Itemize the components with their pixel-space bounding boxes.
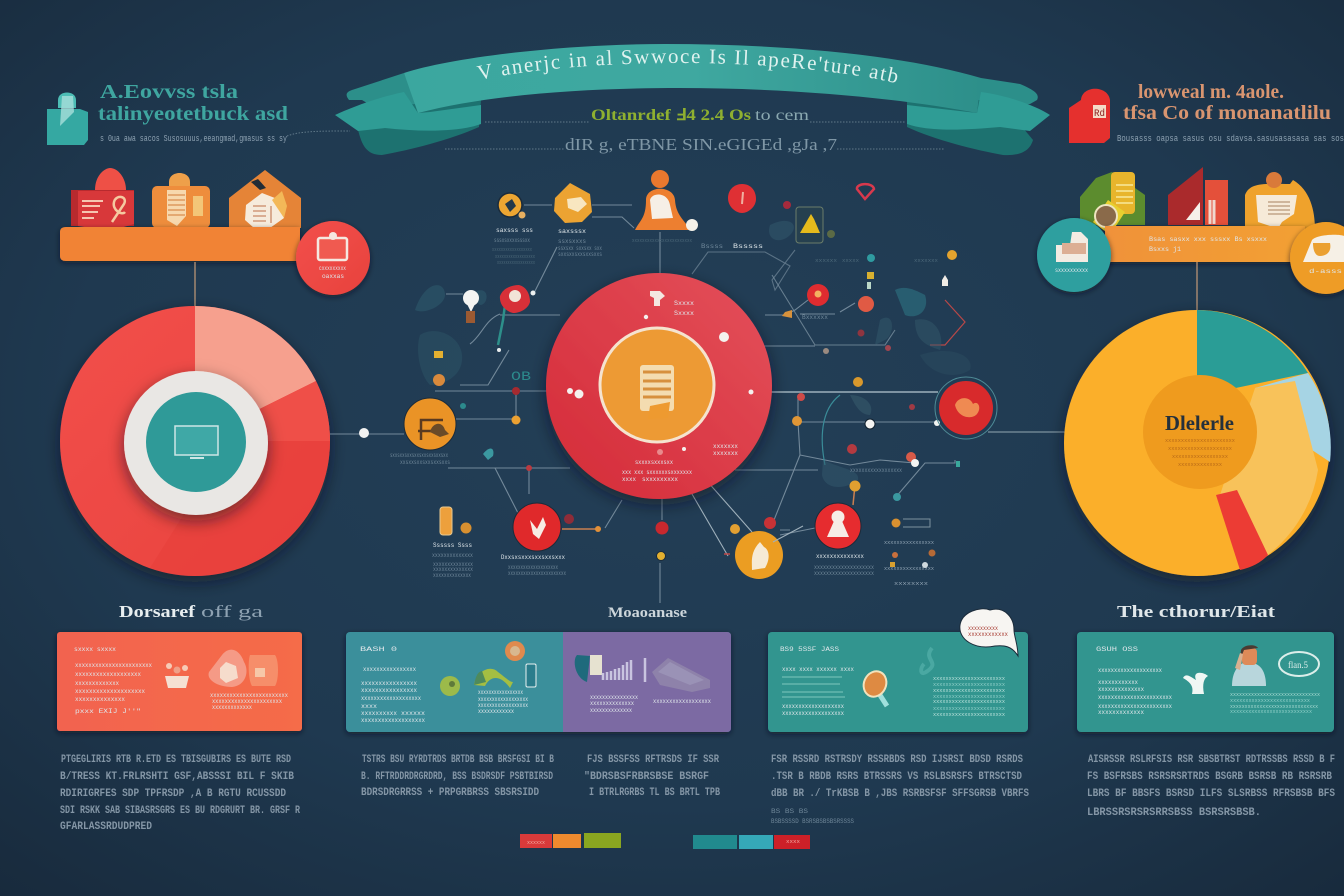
icon: bar columns — [575, 655, 645, 682]
phone icon with label: xxxxxxxxxxxxxx — [432, 552, 473, 559]
person icon — [635, 170, 698, 231]
heading: left column: off ga — [201, 602, 264, 621]
panel: teal and purple: xxxxxxxxxxxxxx — [590, 700, 634, 707]
panel: teal three: xxxxxxxxxxxxxxxxxxxxxxx — [933, 694, 1005, 700]
icon: orange document — [152, 173, 210, 228]
right header: red tag icon: Rd — [1094, 108, 1105, 120]
body text: column three — [584, 754, 720, 799]
right network nodes: xxxxxxxxxxxxxxxxxx — [850, 467, 902, 474]
faint world map shapes — [415, 221, 971, 487]
panel: teal four: xxxxxxxxxxxxxx — [1098, 686, 1144, 693]
left network labels: Bsssss — [733, 243, 764, 250]
network connectors — [435, 205, 1066, 603]
document icon — [640, 365, 674, 419]
panel: coral: xxxxxxxxxxxxxxxxxxxxxxx — [75, 662, 152, 669]
phone icon with label: xxxxxxxxxxxxxx — [433, 561, 473, 568]
panel: teal and purple: xxxxxxxxxx — [361, 710, 397, 717]
body text: column one: B/TRESS KT.FRLRSHTI GSF,ABSSSI BIL F SKIB — [60, 771, 294, 783]
red circle badge: oaxxas — [322, 273, 344, 280]
bottom red person node — [814, 503, 874, 577]
icon: flower basket — [165, 663, 189, 688]
body text: column four: dBB BR ./ TrKBSB B ,JBS RSRBSFSF SFFSGRSB VBRFS — [771, 788, 1029, 800]
central hub circle — [546, 273, 772, 499]
right network nodes: xxxxxx — [815, 258, 837, 264]
legend: left swatches — [520, 833, 621, 848]
bottom node label — [501, 554, 566, 577]
left network labels: sxxsxxsxxsxxsxxs — [558, 251, 602, 258]
body text: column two: B. RFTRDDRDRGRDRD, BSS BSDRSDF PSBTBIRSD — [361, 771, 553, 783]
inner orange disc — [600, 328, 714, 442]
body text: column five: LBRSSRSRSRSRRSBSS BSRSRSBSB. — [1087, 807, 1261, 819]
body text: column two: TSTRS BSU RYRDTRDS BRTDB BSB BRSFGSI BI B — [362, 754, 554, 766]
phone icon with label — [432, 507, 473, 579]
bottom node label: xxxxxxxxxxxxxxxxxxxxxxx — [508, 570, 566, 577]
bottom red node — [513, 503, 601, 551]
icon: green folder — [1080, 172, 1145, 235]
panel: coral: pxxx EXIJ J''" — [75, 708, 141, 715]
left header: bag icon — [47, 92, 88, 145]
icon: red bars — [1168, 167, 1228, 225]
left network labels: xxxxxxxxxxxxxxxxxx — [492, 247, 532, 253]
panel: teal four: xxxxxxxxxxxxxxxxxxxx — [1098, 667, 1162, 674]
panel: teal three: xxxxxxxxxxxxxxxxxxx — [782, 703, 844, 710]
legend: right swatches: xxxx — [786, 839, 800, 845]
panel: teal and purple: BASH 0 — [360, 646, 398, 653]
panel: teal and purple: xxxxxxxxxxxxxxxx — [590, 694, 638, 701]
panel: teal four: xxxxxxxxxxxxx — [1098, 709, 1144, 716]
hub dots and labels: sxxxxsxxxsxx — [635, 459, 673, 466]
left network labels: xxxxxxxxxxxxxxxxxxxxxxxx — [632, 237, 693, 244]
panel: teal and purple: xxxxxxxxxxxxxxxx — [361, 680, 417, 687]
bottom orange bottle node — [724, 524, 803, 579]
left shelf with icons — [60, 168, 301, 261]
legend: left swatches: xxxxxx — [527, 840, 545, 846]
phone icon with label: xxxxxxxxxxxxxx — [433, 566, 473, 573]
panel: coral: xxxxxxxxxxxxxx — [75, 696, 125, 703]
icon: green fruit — [440, 676, 460, 696]
left network labels: sxxsxxsxxsxxsxxsxxsxxsxx — [390, 452, 448, 459]
icon: speech outline — [1279, 652, 1319, 676]
small nodes left — [433, 290, 536, 471]
orange circle node with chart glyph — [404, 398, 456, 450]
right header: red tag icon — [1069, 89, 1110, 143]
orange core with label: xxxxxxxxxxxxxxxxxxxx — [1168, 445, 1233, 452]
body text: column three: I BTRLRGRBS TL BS BRTL TPB — [589, 787, 720, 799]
red hub pin — [500, 285, 530, 313]
left network labels: sssxsxxxxsssxx — [494, 237, 530, 244]
white ring — [124, 371, 268, 515]
body text: column one: SDI RSKK SAB SIBASRSGRS ES BU RDGRURT BR. GRSF R — [60, 805, 300, 817]
panel: teal and purple: xxxxxx — [401, 710, 425, 717]
slice: red — [1216, 490, 1268, 570]
panel: teal three: BS9 5SSF JASS — [780, 646, 839, 653]
body text: column one — [60, 754, 300, 833]
panel: teal three: xxxxxxxxxxxxxxxxxxxxxxx — [933, 682, 1005, 688]
left network labels: ssxsxx sxxsxx sxx — [558, 245, 602, 252]
subtitle: to cem — [755, 107, 810, 124]
icon: isometric slab — [652, 658, 710, 692]
icon: magnifier — [860, 668, 890, 706]
right pie chart — [1064, 310, 1331, 576]
panel: teal four: xxxxxxxxxxxxxxxxxxxxxxxxxxxxxx — [1230, 692, 1320, 698]
left network labels: xxsxxsxxsxxsxxsxxs — [400, 459, 450, 466]
body text: column three: FJS BSSFSS RFTRSDS IF SSR — [587, 754, 719, 766]
red circle badge — [296, 221, 370, 295]
panel: teal four: flan.5 — [1288, 660, 1308, 670]
icon: orange card — [1245, 172, 1315, 232]
left network labels: xxxxxxxxxxxxxxxxxx — [495, 254, 535, 260]
panel: teal four: xxxxxxxxxxxx — [1098, 679, 1138, 686]
orange core with label — [1143, 375, 1257, 489]
icon: person — [1232, 645, 1266, 686]
heart pin icon — [857, 184, 874, 199]
hub dots and labels: xxxxxxx — [713, 450, 738, 457]
panel: coral: xxxxxxxxxxxxxxxxxxxxxxxx — [210, 692, 288, 699]
small legend cluster: xxxxxxxx — [894, 581, 928, 587]
icon: faint hook — [921, 648, 932, 673]
hub dots and labels: Sxxxx — [674, 300, 694, 307]
panel: teal and purple: xxxxxxxxxxxxxxxxxx — [478, 696, 528, 703]
body text: column four — [771, 754, 1029, 825]
heading: left column: Dorsaref — [119, 602, 195, 621]
left header text: talinyeotetbuck asd — [98, 103, 288, 125]
orange core with label: Dlelerle — [1165, 411, 1234, 435]
panel: teal four: xxxxxxxxxxxxxxxxxxxxxxx — [1098, 703, 1172, 710]
panel: teal three: xxxxxxxxxxxxxxxxxxxxxxx — [933, 699, 1005, 705]
hub dots and labels: xxxx — [622, 476, 636, 483]
slice: pale yellow — [1220, 381, 1318, 557]
subtitle: dIR g, eTBNE SIN.eGIGEd ,gJa ,7 — [565, 135, 838, 154]
top-left ring icon — [498, 193, 526, 218]
teal circle badge — [1037, 218, 1111, 292]
subtitle: Oltanrdef Ⅎ4 2.4 Os — [591, 107, 751, 124]
large red ringed node — [935, 377, 997, 439]
body text: column two — [361, 754, 554, 799]
right network nodes: xxxxxxx — [914, 258, 938, 264]
small legend cluster — [884, 540, 936, 587]
heading: middle column: Moaoanase — [608, 605, 687, 621]
hub dots and labels — [567, 291, 754, 483]
right network nodes: Bxxxxxx — [802, 314, 828, 321]
panel: teal three: xxxxxxxxxxxxxxxxxxxxxxx — [933, 712, 1005, 718]
body text: column four: .TSR B RBDB RSRS BTRSSRS VS RSLBSRSFS BTRSCTSD — [771, 771, 1022, 783]
panel: teal three — [768, 632, 1028, 732]
body text: column four: FSR RSSRD RSTRSDY RSSRBDS RSD IJSRSI BDSD RSRDS — [771, 754, 1023, 766]
panel: teal and purple: xxxxxxxxxxxxxxxxxx — [653, 698, 711, 705]
bottom node label: Dxxsxsxxxsxxsxxsxxx — [501, 554, 565, 561]
panel: teal four: xxxxxxxxxxxxxxxxxxxxxxxxxxx — [1230, 709, 1312, 715]
phone icon with label: xxxxxxxxxxxxxx — [433, 572, 471, 579]
panel: teal three: xxxxxxxxxxxxxxxxxxx — [782, 710, 844, 717]
left header text: s 0ua awa sacos Susosuuus,eeangmad,gmasus ss sy — [100, 134, 287, 144]
icon: bag shapes — [209, 650, 278, 687]
orange circle badge right: d-asss — [1309, 268, 1343, 275]
right header text: lowweal m. 4aole. — [1138, 81, 1284, 103]
panel: coral: xxxxxxxxxxxxxxxxxxx — [75, 671, 141, 678]
left network labels: saxsss sss — [496, 227, 533, 234]
panel: teal and purple: xxxxxxxxxxxx — [478, 708, 514, 715]
hub dots and labels: xxx xxx sxxxxxxsxxxxxxx — [622, 469, 692, 476]
connector: left pie to hub — [330, 428, 404, 438]
icon: white splash — [1183, 673, 1208, 694]
white pin icon — [446, 290, 479, 323]
left network labels — [390, 227, 764, 466]
right network nodes — [764, 250, 960, 529]
right shelf with icons — [1080, 167, 1315, 262]
teal core with monitor icon — [146, 392, 246, 492]
body text: column one: GFARLASSRDUDPRED — [60, 821, 152, 833]
left header text: A.Eovvss tsla — [100, 81, 238, 103]
orange core with label: xxxxxxxxxxxxxxxxxx — [1172, 453, 1229, 460]
hub dots and labels: xxxxxxx — [713, 443, 738, 450]
panel: teal three: xxxx xxxx xxxxxx xxxx — [782, 666, 854, 673]
small legend cluster: xxxxxxxxxxxxxxxx — [884, 566, 934, 572]
bottom red person node: xxxxxxxxxxxxxxxxxxxx — [814, 570, 874, 577]
panel: coral — [57, 632, 302, 731]
icon: red folder — [71, 168, 134, 232]
title ribbon banner — [335, 44, 1050, 156]
orange core with label: xxxxxxxxxxxxxxxxxxxxxx — [1165, 437, 1236, 444]
panel: coral: xxxxxxxxxxxxxxxxxxxx — [75, 688, 145, 695]
panel: teal four — [1077, 632, 1334, 732]
body text: column four: BSBSSSSD BSRSBSBSBSRSSSS — [771, 818, 854, 825]
panel: teal and purple: xxxx — [361, 703, 377, 710]
panel: teal and purple: xxxxxxxxxxxxxxxxxxx — [361, 717, 425, 724]
panel: coral: xxxxxxxxxxxxx — [212, 704, 252, 711]
left network labels: xxxxxxxxxxxxxxxxxx — [497, 260, 535, 266]
slice: light blue — [1255, 373, 1331, 462]
right header text: tfsa Co of monanatlilu — [1123, 102, 1331, 124]
hub dots and labels: Sxxxx — [674, 310, 694, 317]
body text: column five — [1087, 754, 1335, 819]
panel: coral: xxxxxxxxxxxxxxxxxxxxxx — [212, 698, 282, 705]
panel: teal and purple — [346, 632, 731, 732]
right shelf with icons: Bsas sasxx xxx sssxx Bs xsxxx — [1149, 236, 1267, 243]
subtitle — [445, 107, 945, 154]
icon: orange house — [229, 170, 301, 228]
heading: right column: The cthorur/Eiat — [1117, 602, 1275, 621]
panel: teal four: xxxxxxxxxxxxxxxxxxxxxxx — [1098, 694, 1172, 701]
panel: teal and purple: xxxxxxxxxxxxxxxxx — [478, 689, 523, 696]
body text: column three: "BDRSBSFRBRSBSE BSRGF — [584, 771, 709, 783]
panel: coral: xxxxxxxxxxxxx — [75, 680, 119, 687]
speech bubble: xxxxxxxxxx — [968, 625, 998, 632]
gold polygon icon — [554, 183, 592, 223]
icon: plant and phone — [474, 641, 536, 688]
left network labels: ssxsxxxs — [558, 238, 586, 245]
speech bubble — [960, 609, 1018, 656]
panel: coral: sxxxx sxxxx — [74, 646, 116, 653]
bottom red person node: xxxxxxxxxxxxxxxxxxxx — [814, 564, 874, 571]
panel: teal and purple: xxxxxxxxxxxxxxxxxx — [478, 702, 528, 709]
panel: teal four: xxxxxxxxxxxxxxxxxxxxxxxxxxxxxx — [1230, 704, 1318, 710]
panel: teal three: xxxxxxxxxxxxxxxxxxxxxxx — [933, 706, 1005, 712]
panel: teal and purple: xxxxxxxxxxxxxxxx — [363, 666, 416, 673]
phone icon with label: Ssssss Ssss — [433, 542, 472, 549]
right header text — [1117, 81, 1344, 144]
banner title text: V anerjc in al Swwoce Is Il apeRe'ture atb — [476, 50, 898, 82]
body text: column four: BS BS BS — [771, 808, 809, 815]
teal circle badge: sxxxxxxxxxx — [1055, 267, 1088, 274]
slice: teal — [1197, 310, 1308, 443]
panel: teal and purple: xxxxxxxxxxxxxxxxxxx — [361, 695, 421, 702]
right shelf with icons: Bsxxs j1 — [1149, 246, 1181, 253]
legend: right swatches — [693, 835, 810, 849]
left network labels: Bssss — [701, 243, 723, 250]
bottom center nodes — [656, 522, 668, 560]
left pie chart — [60, 306, 330, 576]
heading: left column — [119, 602, 264, 621]
orange core with label: xxxxxxxxxxxxxx — [1178, 461, 1223, 468]
orange circle badge right — [1290, 222, 1344, 294]
bottom node label: xxxxxxxxxxxxxxxxxxxx — [508, 564, 558, 571]
small nodes left: OB — [511, 369, 531, 384]
panel: teal and purple: xxxxxxxxxxxxxxxx — [361, 687, 417, 694]
small legend cluster: xxxxxxxxxxxxxxxx — [884, 540, 934, 546]
panel: teal four: xxxxxxxxxxxxxxxxxxxxxxxxxx — [1230, 698, 1310, 704]
right network nodes: xxxxx — [842, 258, 859, 264]
red pin top — [728, 184, 756, 213]
body text: column one: RDIRIGRFES SDP TPFRSDP ,A B RGTU RCUSSDD — [60, 788, 286, 800]
panel: teal three: xxxxxxxxxxxxxxxxxxxxxxx — [933, 688, 1005, 694]
panel: teal four: GSUH OSS — [1096, 646, 1139, 653]
left network labels: saxsssx — [558, 228, 586, 235]
left header text — [98, 81, 350, 144]
panel: teal and purple: xxxxxxxxxxxxxx — [590, 707, 632, 714]
panel: teal three: xxxxxxxxxxxxxxxxxxxxxxx — [933, 676, 1005, 682]
hub dots and labels: sxxxxxxxxx — [642, 476, 678, 483]
yellow icon box — [783, 201, 835, 243]
red circle badge: cxxxxxxxxx — [319, 265, 346, 272]
body text: column one: PTGEGLIRIS RTB R.ETD ES TBISGUBIRS ES BUTE RSD — [61, 754, 291, 766]
body text: column two: BDRSDRGRRSS + PRPGRBRSS SBSRSIDD — [361, 787, 539, 799]
bottom red person node: xxxxxxxxxxxxxx — [816, 553, 864, 560]
speech bubble: xxxxxxxxxxxx — [968, 631, 1008, 638]
